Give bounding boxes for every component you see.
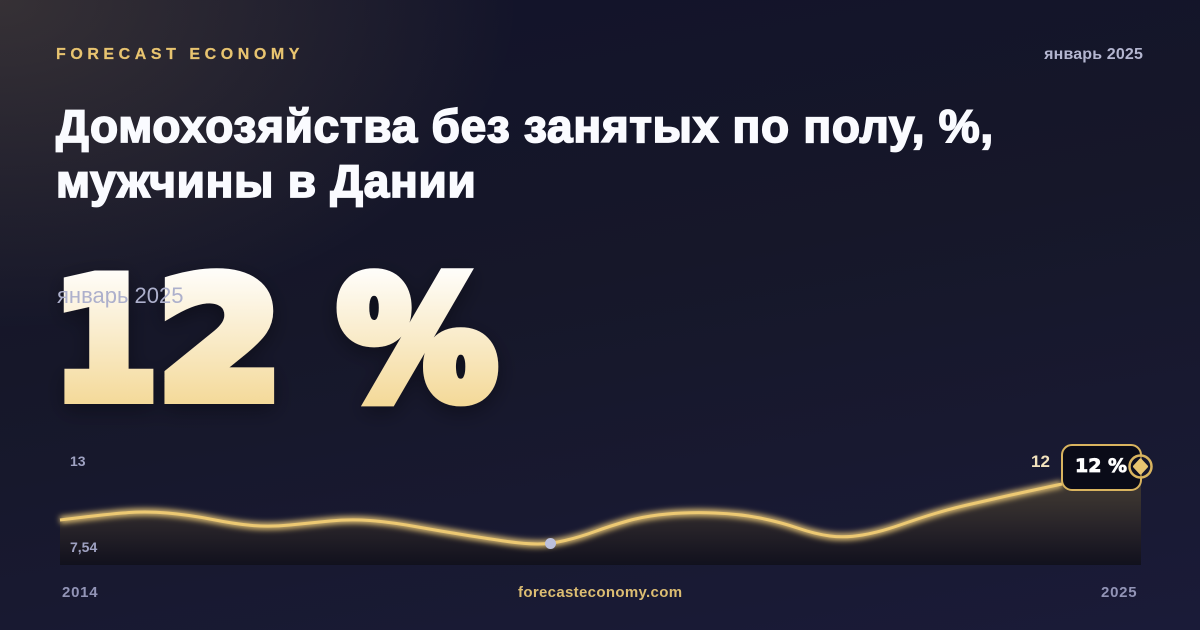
date top right: январь 2025 — [1044, 46, 1143, 63]
axis min: 7,54 — [70, 539, 97, 555]
end year: 2025 — [1101, 584, 1137, 601]
website: forecasteconomy.com — [518, 584, 682, 601]
area fill — [60, 466, 1141, 565]
title: Домохозяйства без занятых по полу, %, — [56, 100, 994, 152]
big value: % — [338, 245, 497, 436]
big value — [53, 245, 498, 436]
big value: 1 — [53, 245, 157, 436]
big value: 2 — [158, 245, 282, 436]
end marker — [1130, 456, 1152, 478]
brand label: FORECAST ECONOMY — [56, 46, 304, 63]
line glow — [60, 484, 1062, 544]
max label: 12 — [1031, 452, 1050, 471]
value badge — [1062, 445, 1141, 490]
axis max: 13 — [70, 453, 86, 469]
line — [60, 484, 1062, 544]
title — [56, 100, 994, 208]
start year: 2014 — [62, 584, 98, 601]
date overlay: январь 2025 — [57, 283, 184, 308]
title: мужчины в Дании — [56, 154, 477, 206]
minimum dot — [545, 538, 556, 549]
value badge: 12 % — [1075, 455, 1127, 477]
